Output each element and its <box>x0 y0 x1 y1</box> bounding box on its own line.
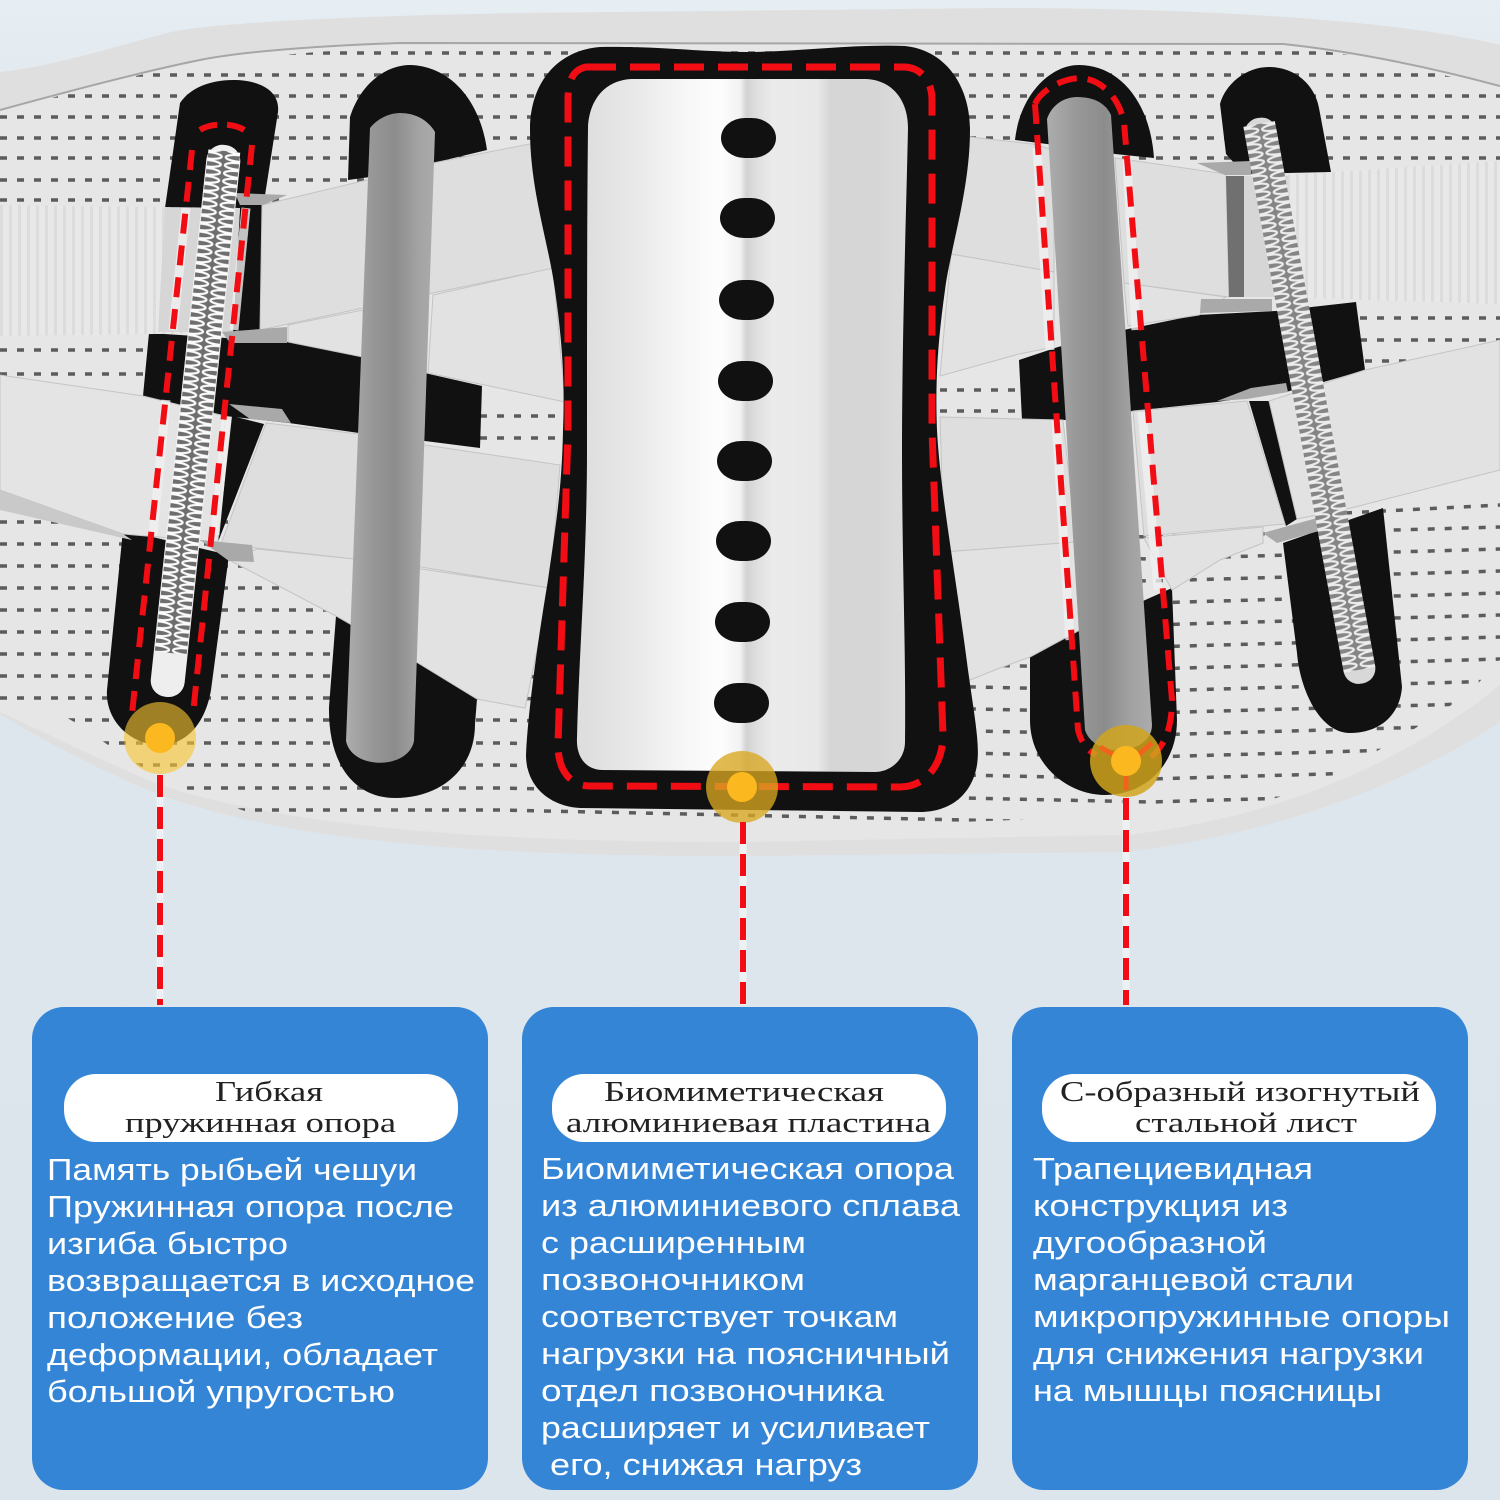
heading pill: aluminium plate: Биомиметическая <box>604 1076 884 1108</box>
body text: aluminium plate: отдел позвоночника <box>541 1373 885 1408</box>
body text: aluminium plate <box>541 1151 961 1482</box>
center red dashed outline <box>558 67 943 787</box>
body text: aluminium plate: Биомиметическая опора <box>541 1151 955 1186</box>
panel: steel sheet <box>1012 1007 1468 1490</box>
body text: spring support: деформации, обладает <box>47 1337 438 1372</box>
right red dashed guide <box>1035 78 1172 758</box>
body text: spring support: Пружинная опора после <box>47 1189 454 1224</box>
body text: steel sheet: конструкция из <box>1033 1188 1288 1223</box>
body text: spring support: возвращается в исходное <box>47 1263 475 1298</box>
body text: steel sheet: на мышцы поясницы <box>1033 1373 1382 1408</box>
belt fabric body <box>0 8 1500 856</box>
lumbar belt product image <box>0 8 1500 856</box>
body text: spring support: Память рыбьей чешуи <box>47 1152 417 1187</box>
heading pill: spring support: пружинная опора <box>125 1107 396 1139</box>
heading pill: aluminium plate <box>552 1074 946 1142</box>
body text: aluminium plate: нагрузки на поясничный <box>541 1336 950 1371</box>
grey support straps <box>0 135 1500 708</box>
leader line: center <box>740 822 746 1005</box>
perforated stitch rows <box>0 53 1500 824</box>
leader line: right <box>1122 798 1130 1005</box>
heading pill: steel sheet: С-образный изогнутый <box>1060 1076 1420 1108</box>
heading pill: spring support: Гибкая <box>215 1076 323 1108</box>
body text: steel sheet: микропружинные опоры <box>1033 1299 1450 1334</box>
heading pill: spring support <box>64 1074 458 1142</box>
center black pad <box>526 46 978 812</box>
black pads behind the straps <box>107 65 1402 798</box>
aluminium plate <box>577 79 908 772</box>
left red dashed guide <box>132 125 252 714</box>
body text: spring support: большой упругостью <box>47 1374 395 1409</box>
body text: aluminium plate: его, снижая нагруз <box>550 1447 862 1482</box>
body text: spring support <box>47 1152 475 1409</box>
metal strap buckles <box>200 161 1319 562</box>
callout marker: left <box>124 702 196 774</box>
body text: aluminium plate: из алюминиевого сплава <box>541 1188 961 1223</box>
callout marker: center <box>706 751 778 823</box>
body text: steel sheet <box>1033 1151 1450 1408</box>
panel: aluminium plate <box>522 1007 978 1490</box>
body text: aluminium plate: позвоночником <box>541 1262 805 1297</box>
heading pill: steel sheet <box>1042 1074 1436 1142</box>
belt top seam <box>0 43 1500 110</box>
heading pill: steel sheet: стальной лист <box>1135 1107 1357 1139</box>
inner fabric <box>0 43 1500 842</box>
body text: steel sheet: для снижения нагрузки <box>1033 1336 1424 1371</box>
body text: aluminium plate: с расширенным <box>541 1225 806 1260</box>
body text: spring support: изгиба быстро <box>47 1226 288 1261</box>
body text: spring support: положение без <box>47 1300 303 1335</box>
plate holes <box>714 118 776 723</box>
heading pill: aluminium plate: алюминиевая пластина <box>566 1107 931 1139</box>
body text: aluminium plate: расширяет и усиливает <box>541 1410 930 1445</box>
callout marker: right <box>1090 725 1162 797</box>
body text: aluminium plate: соответствует точкам <box>541 1299 898 1334</box>
right steel bar <box>1047 97 1152 750</box>
panel: spring support <box>32 1007 488 1490</box>
body text: steel sheet: марганцевой стали <box>1033 1262 1354 1297</box>
left spring <box>149 143 242 699</box>
leader line: left <box>156 775 164 1005</box>
body text: steel sheet: Трапециевидная <box>1033 1151 1313 1186</box>
left steel bar <box>346 113 435 763</box>
body text: steel sheet: дугообразной <box>1033 1225 1267 1260</box>
right spring <box>1242 115 1378 686</box>
